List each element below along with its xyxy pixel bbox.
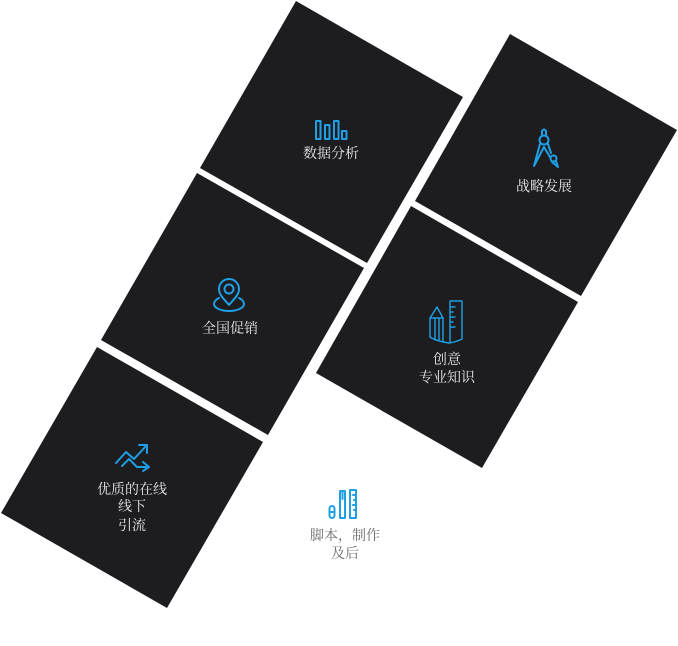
panel: quality online offline traffic: 线下 <box>118 498 146 515</box>
block: script and production: 及后 <box>331 546 359 562</box>
text: creative expertise: 创意 <box>433 351 461 368</box>
text: nationwide promotion: 全国促销 <box>202 320 258 337</box>
panel: data analysis <box>200 1 463 263</box>
icon: compass <box>534 130 558 167</box>
icon: pencil and ruler <box>430 301 462 343</box>
panel: creative expertise: 专业知识 <box>419 370 476 386</box>
panel: strategy development <box>415 34 677 296</box>
panel: creative expertise <box>316 206 578 468</box>
text: script and production: 脚本，制作 <box>310 527 380 544</box>
panel: quality online offline traffic: 引流 <box>118 517 146 534</box>
panel: quality online offline traffic <box>1 347 263 608</box>
text: data analysis: 数据分析 <box>303 145 359 162</box>
text: strategy development: 战略发展 <box>516 178 572 195</box>
block: script and production <box>310 490 380 562</box>
icon: film tools <box>330 490 356 518</box>
icon: map pin <box>214 279 244 311</box>
icon: trend arrows <box>116 445 149 471</box>
text: quality online offline traffic: 优质的在线 <box>97 481 167 498</box>
panel: nationwide promotion <box>101 173 364 435</box>
icon: bar chart <box>316 121 346 139</box>
